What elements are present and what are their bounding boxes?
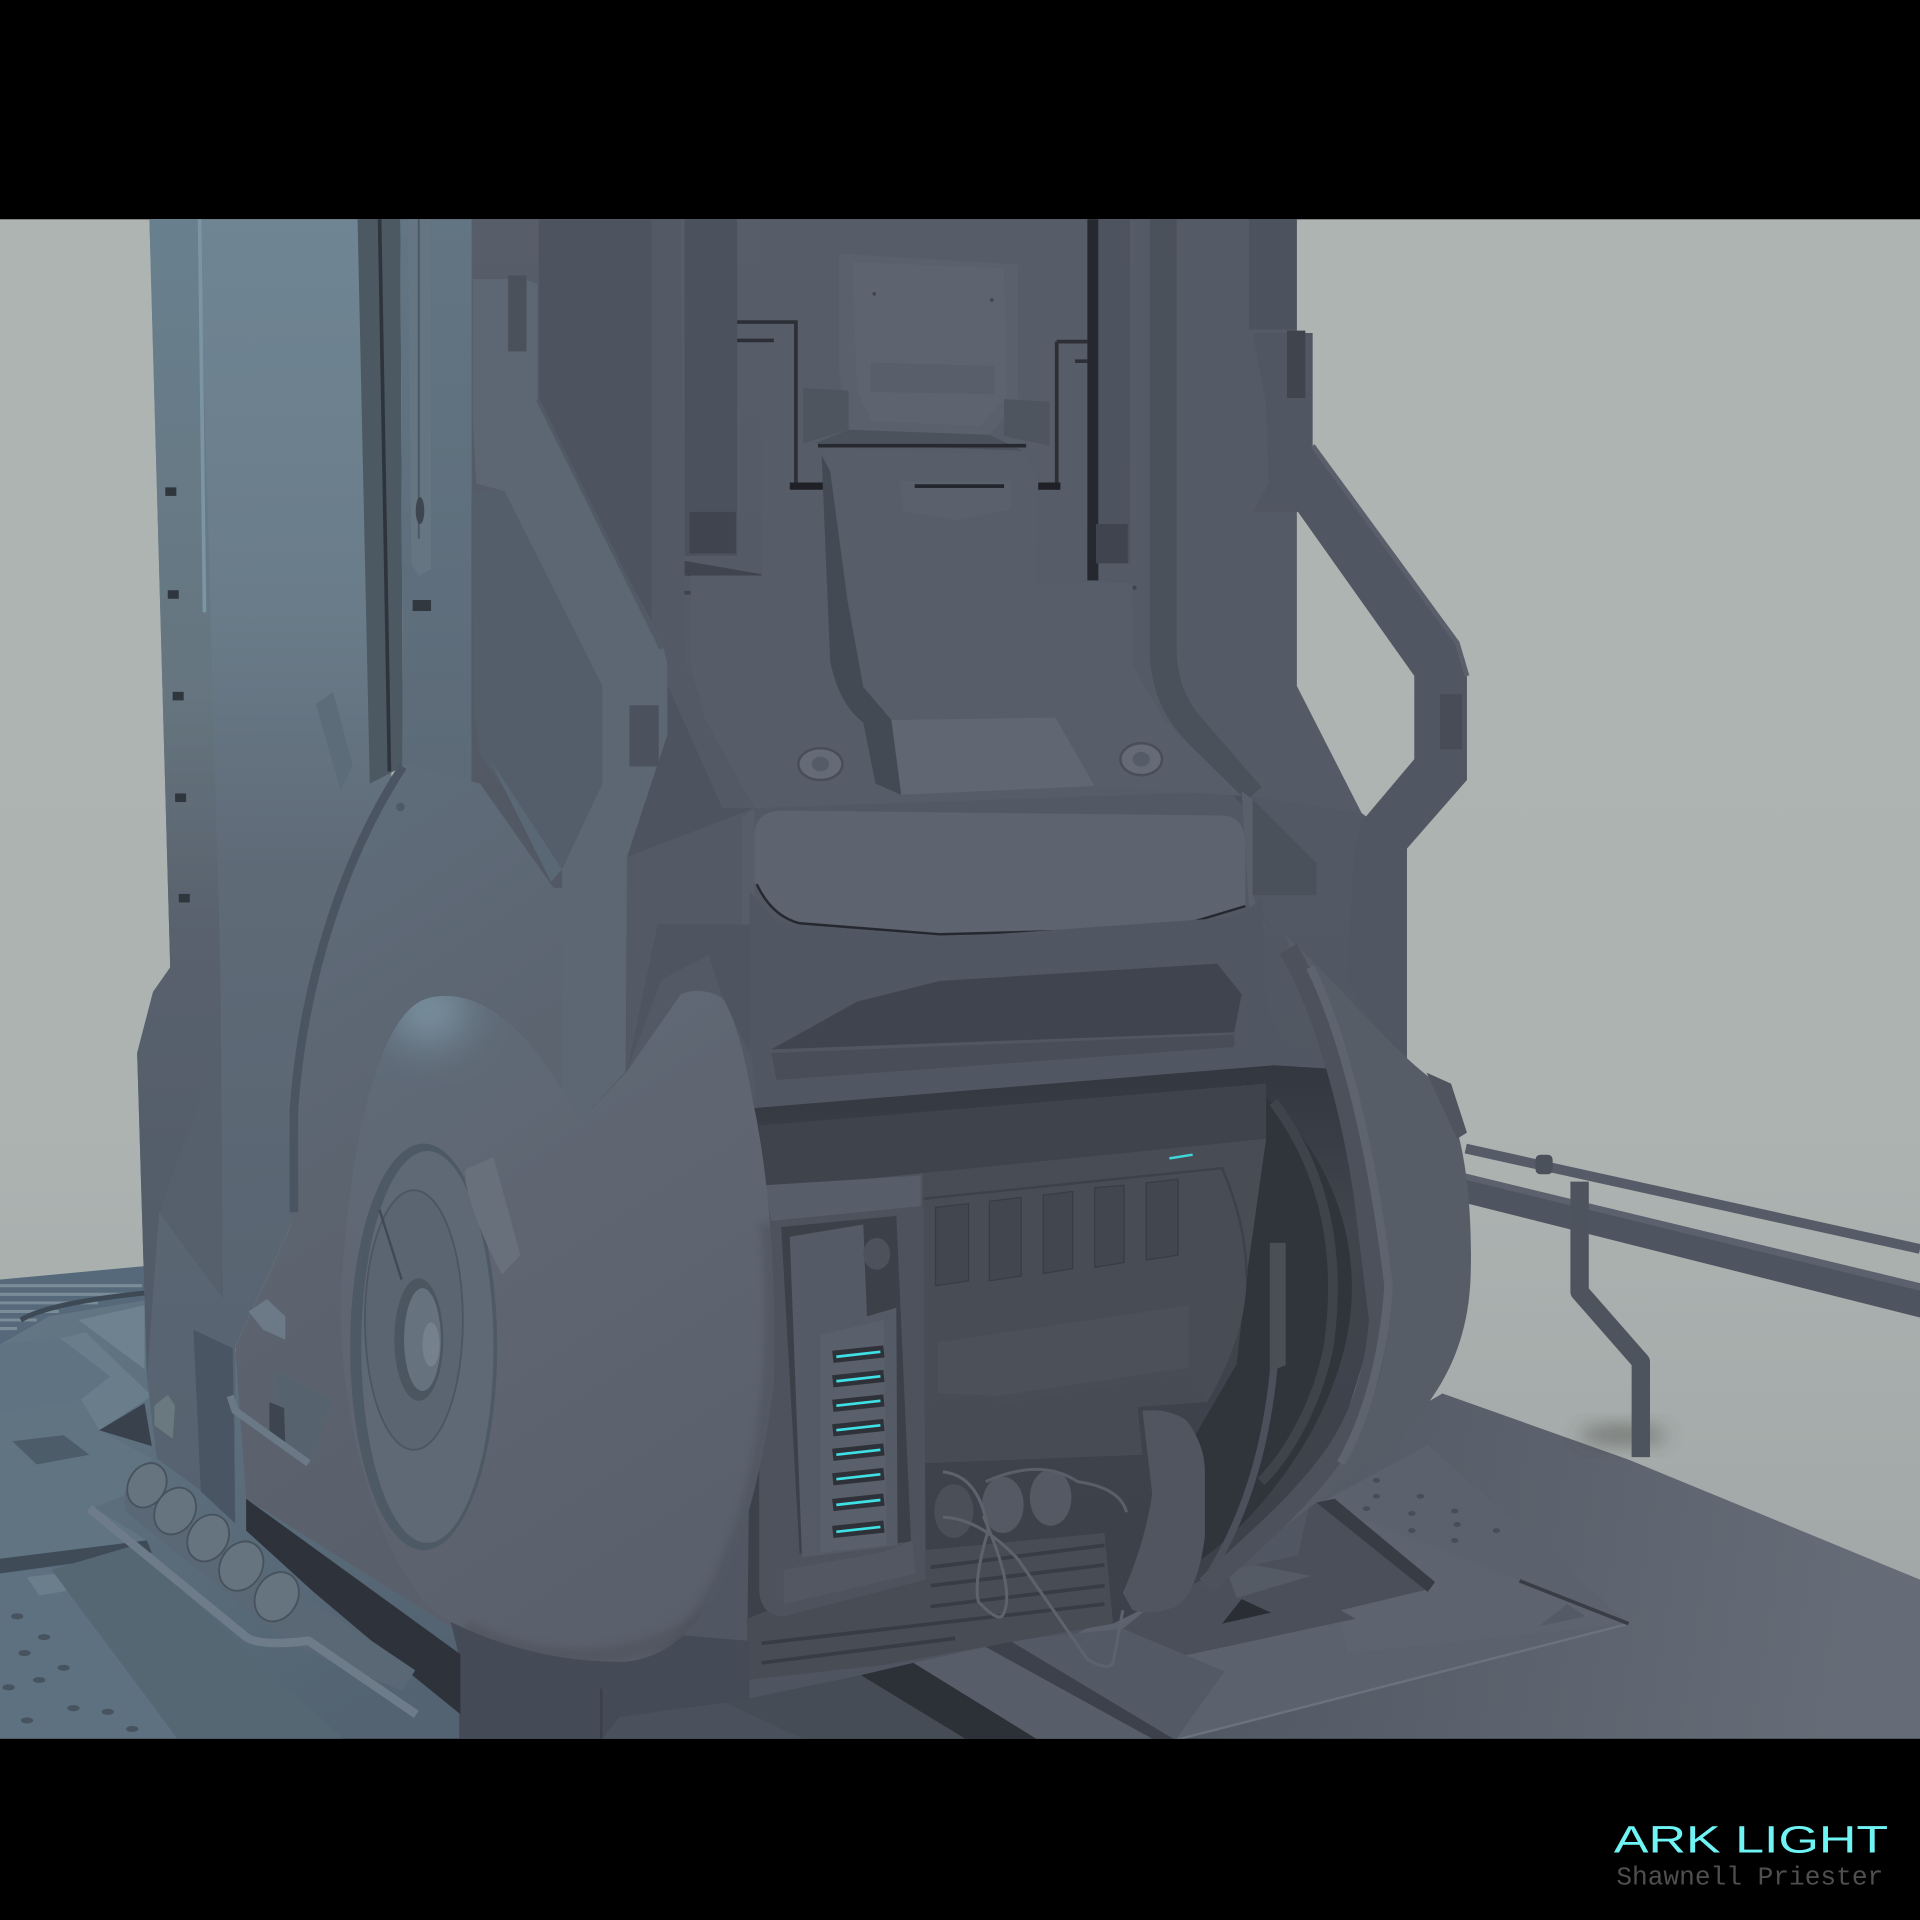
seat strap bbox=[818, 446, 1095, 795]
logo: ARK LIGHT: ARK LIGHT bbox=[1614, 1820, 1888, 1862]
wheel disc bbox=[350, 1144, 497, 1550]
tower: central body bbox=[471, 219, 1407, 1678]
vent stack bbox=[747, 1533, 1113, 1680]
back plate bbox=[691, 219, 1242, 808]
knob row bbox=[89, 1456, 460, 1714]
floor: left deck bbox=[0, 1266, 460, 1739]
side latch bbox=[230, 1369, 332, 1463]
bottom plinth bbox=[449, 1616, 749, 1740]
seat backrest panel bbox=[804, 292, 1049, 450]
open cavity bbox=[747, 1065, 1376, 1680]
cables bbox=[943, 1472, 1123, 1666]
drive belt bbox=[1206, 1249, 1280, 1580]
vertical slot bbox=[358, 219, 403, 784]
author credit: Shawnell Priester bbox=[1616, 1862, 1883, 1892]
guard rail bbox=[1463, 1149, 1920, 1457]
canisters bbox=[934, 1484, 973, 1538]
right wheel shroud bbox=[1202, 934, 1471, 1586]
drum ring bbox=[1196, 1101, 1352, 1558]
drum hull bbox=[923, 1139, 1266, 1463]
lower cross bar bbox=[772, 904, 1263, 1080]
wheel dome bbox=[340, 978, 774, 1662]
left channel column bbox=[684, 219, 737, 556]
floor rivets left bbox=[2, 1613, 138, 1732]
roller bbox=[1123, 1410, 1205, 1613]
dome tab bbox=[465, 1157, 520, 1275]
floor: right deck bbox=[601, 1393, 1920, 1740]
left shroud panel bbox=[235, 764, 754, 1653]
left side handle bbox=[473, 276, 668, 1120]
hull panels bbox=[936, 1179, 1178, 1286]
seat base bbox=[754, 586, 1246, 936]
LED panel bbox=[759, 1173, 926, 1616]
floor rivets right bbox=[1363, 1478, 1500, 1543]
render frame bbox=[0, 219, 1920, 1740]
studio backdrop bbox=[0, 219, 1920, 1739]
LED indicators bbox=[832, 1345, 885, 1538]
tower: left face bbox=[137, 219, 472, 1523]
right side handle bbox=[1242, 331, 1467, 1078]
floor contact shadow bbox=[1578, 1428, 1667, 1442]
cyan status light bbox=[1169, 1155, 1193, 1158]
slat panel bbox=[400, 219, 472, 782]
